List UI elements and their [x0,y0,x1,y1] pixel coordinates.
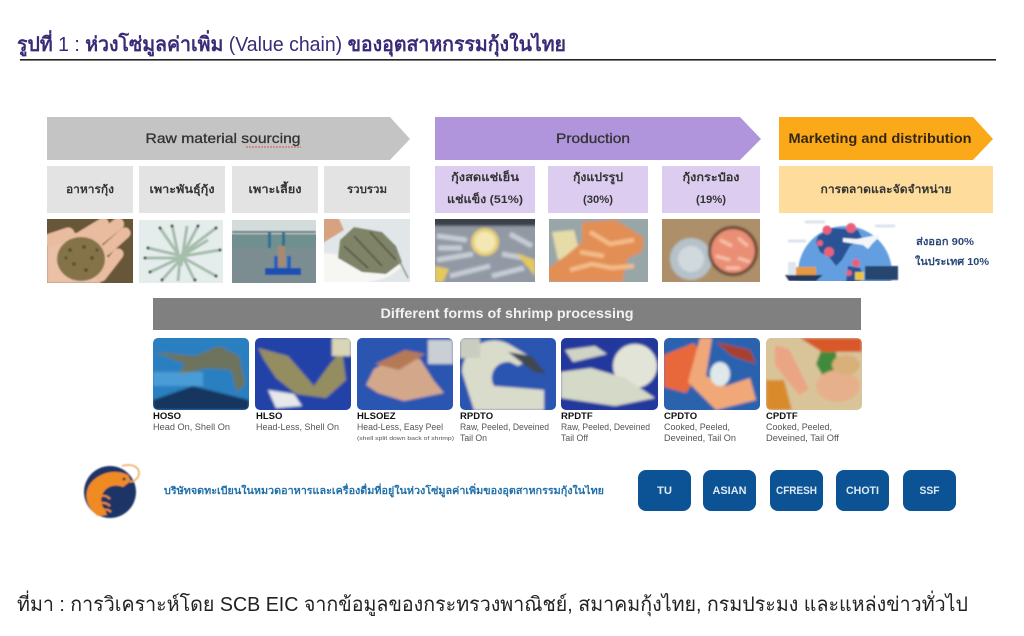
photo: feed pellets in hand [47,219,133,283]
panel: shrimp product forms [146,331,869,444]
box: collection [324,166,410,213]
tag: CFRESH: CFRESH [776,485,817,497]
text: export and domestic share: ส่งออก 90% [916,236,975,248]
arrow: marketing and distribution: Marketing and distribution [788,130,972,146]
product: CPDTF: CPDTF [766,411,798,422]
photo: shrimp farm pond [232,220,316,283]
company tags [638,470,956,511]
box: fresh frozen shrimp: แช่แข็ง (51%) [447,192,523,206]
box: marketing and distribution (Thai): การตลาดและจัดจำหน่าย [820,183,952,196]
tag: CFRESH [770,470,823,511]
product: HLSOEZ: (shell split down back of shrimp) [357,436,454,442]
photo: fresh shrimp with lemon [435,219,535,282]
box: shrimp feed: อาหารกุ้ง [66,183,114,197]
box: processed shrimp: กุ้งแปรรูป [573,171,623,185]
product: HLSO: Head-Less, Shell On [256,422,339,433]
panel: marketing and distribution [779,117,993,281]
arrow: raw material sourcing [47,117,410,160]
box: shrimp feed [47,166,133,213]
tag: CHOTI [836,470,889,511]
icon: shrimp logo [84,465,139,518]
photo: canned shrimp [662,219,760,282]
title: รูปที่ 1 : ห่วงโซ่มูลค่าเพิ่ม (Value chain) ของอุตสาหกรรมกุ้งในไทย [17,29,566,58]
product: RPDTF: Tail Off [561,433,588,444]
text: listed companies description: บริษัทจดทะเบียนในหมวดอาหารและเครื่องดื่มที่อยู่ในห่วงโซ่มูลค่าเพิ่มของอุตสาหกรรมกุ้งในไทย [164,483,604,498]
tag: TU [638,470,691,511]
arrow: production: Production [556,130,630,146]
box: canned shrimp: (19%) [696,194,726,206]
box: canned shrimp [662,166,760,213]
box: fresh frozen shrimp [435,166,535,213]
box: processed shrimp: (30%) [583,194,613,206]
tag: SSF [903,470,956,511]
box: fresh frozen shrimp: กุ้งสดแช่เย็น [451,170,520,185]
product: HOSO: HOSO [153,411,181,422]
box: collection: รวบรวม [347,184,387,196]
heading bar: different forms of shrimp processing: Different forms of shrimp processing [380,305,634,321]
product: CPDTO: Deveined, Tail On [664,433,736,444]
tag: CHOTI: CHOTI [846,485,879,497]
product: RPDTO [460,338,556,441]
product: CPDTF [766,338,862,442]
tag: TU: TU [657,485,672,497]
arrow: marketing and distribution [779,117,993,160]
tag: SSF: SSF [920,485,940,497]
product: CPDTF: Cooked, Peeled, [766,422,832,433]
product: RPDTO: RPDTO [460,411,493,422]
arrow: raw material sourcing: Raw material sourcing [146,130,300,146]
box: marketing and distribution (Thai) [779,166,993,213]
arrow: production [435,117,761,160]
tag: ASIAN [703,470,756,511]
source note: ที่มา : การวิเคราะห์โดย SCB EIC จากข้อมูลของกระทรวงพาณิชย์, สมาคมกุ้งไทย, กรมประมง และแหล่งข่าวทั่วไป [17,590,968,617]
product: HOSO: Head On, Shell On [153,422,230,433]
product: CPDTO [664,338,760,442]
box: canned shrimp: กุ้งกระป๋อง [682,171,740,185]
product: CPDTO: CPDTO [664,411,697,422]
product: RPDTF [561,338,658,441]
product: HLSO: HLSO [256,411,282,422]
product: RPDTF: Raw, Peeled, Deveined [561,422,650,433]
product: HLSOEZ: Head-Less, Easy Peel [357,422,443,433]
text: export and domestic share: ในประเทศ 10% [915,254,990,268]
product: CPDTO: Cooked, Peeled, [664,422,730,433]
photo: processed cooked shrimp [549,219,648,282]
product: HLSOEZ [357,338,454,441]
product: HLSOEZ: HLSOEZ [357,411,396,422]
box: farming [232,166,318,213]
product: RPDTF: RPDTF [561,411,593,422]
box: farming: เพาะเลี้ยง [248,181,302,196]
photo: harvested shrimp in gloved hand [324,219,410,282]
text: export and domestic share [915,236,990,268]
box: breeding: เพาะพันธุ์กุ้ง [150,183,214,197]
product: RPDTO: Tail On [460,433,487,444]
photo: shrimp larvae [139,220,223,283]
panel: raw material sourcing [40,117,418,290]
product: CPDTF: Deveined, Tail Off [766,433,839,444]
tag: ASIAN: ASIAN [712,485,747,497]
product: HOSO [153,338,249,432]
panel: production [428,117,767,290]
heading bar: different forms of shrimp processing [153,298,861,330]
box: processed shrimp [548,166,648,213]
box: breeding [139,166,225,213]
product: HLSO [255,338,351,432]
product: RPDTO: Raw, Peeled, Deveined [460,422,549,433]
illustration: global logistics [784,220,900,281]
